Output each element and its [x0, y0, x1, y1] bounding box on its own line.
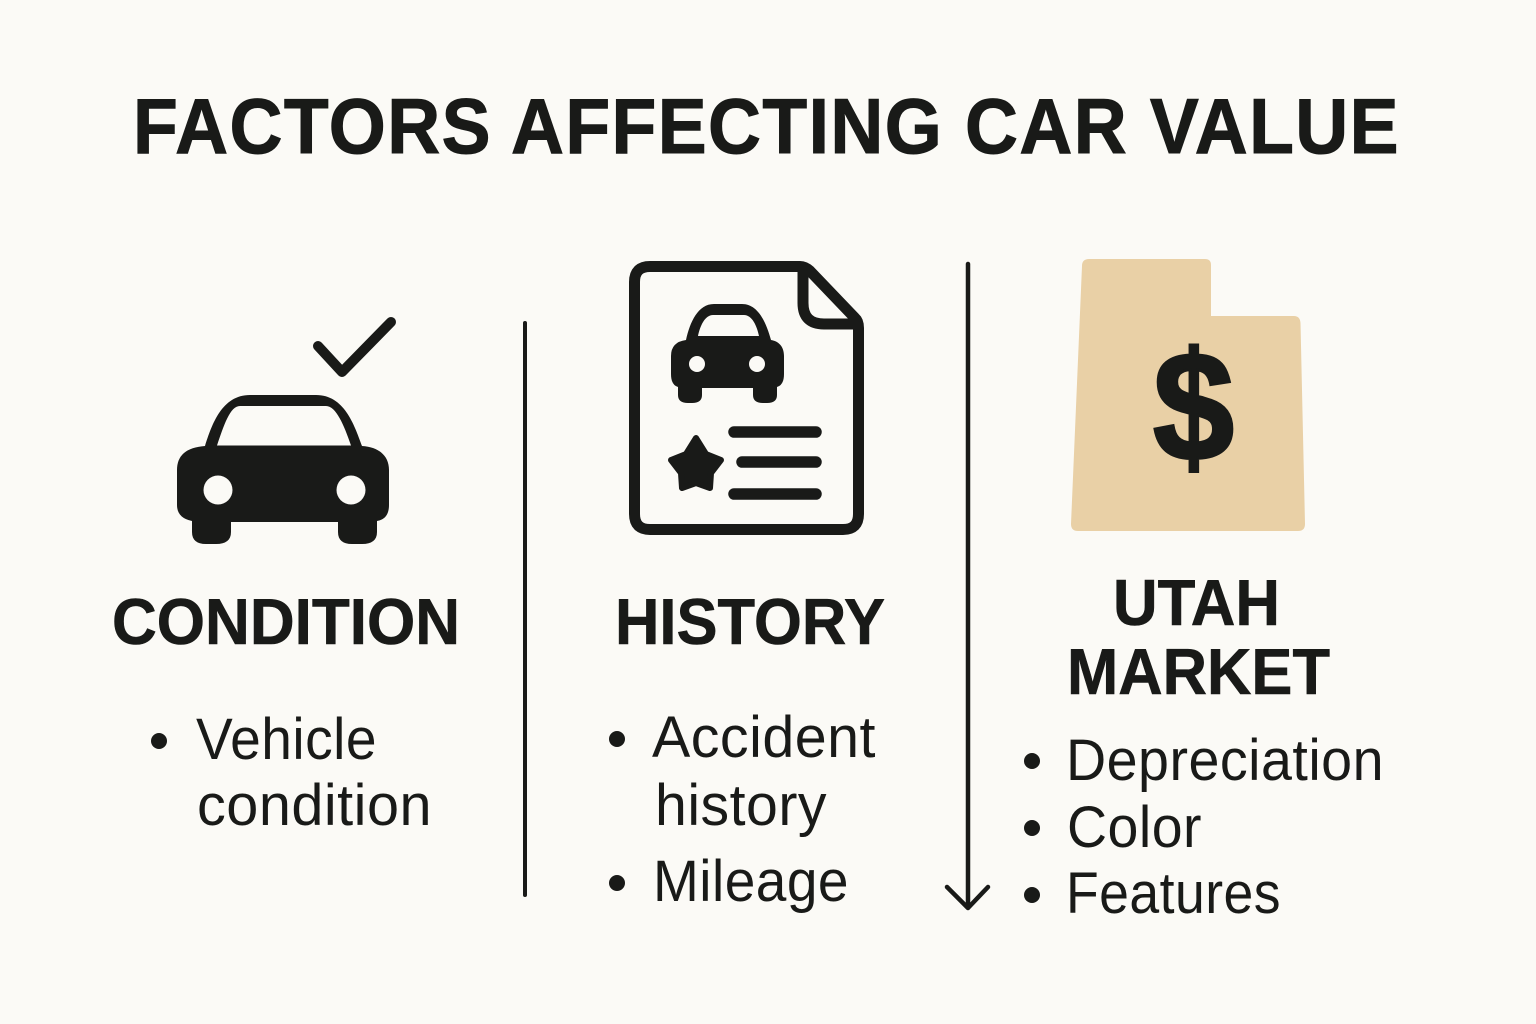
list: utah market: Features [1066, 861, 1281, 926]
icon: small car [671, 304, 784, 403]
heading: utah market [1067, 566, 1330, 708]
list: utah market: Depreciation [1066, 728, 1384, 793]
panel: utah market [1024, 259, 1384, 926]
list: condition [151, 707, 432, 838]
heading: utah market: MARKET [1067, 635, 1330, 708]
list: history: Accident [652, 705, 876, 770]
panel: history [609, 266, 885, 914]
icon: check mark [318, 322, 391, 372]
list: history [609, 705, 876, 914]
list: utah market [1024, 728, 1384, 926]
heading: condition: CONDITION [112, 585, 460, 658]
title: FACTORS AFFECTING CAR VALUE [133, 82, 1400, 170]
icon: car [177, 395, 389, 544]
icon: Utah map [1071, 259, 1305, 531]
list: condition: condition [197, 773, 432, 838]
icon: dollar sign: $ [1153, 320, 1234, 493]
list: utah market: Color [1067, 795, 1202, 860]
list: history: Mileage [653, 849, 849, 914]
list: condition: Vehicle [196, 707, 377, 772]
heading: utah market: UTAH [1113, 566, 1280, 639]
panel: condition [112, 322, 460, 838]
divider: left vertical line [523, 323, 527, 895]
heading: history: HISTORY [615, 585, 885, 658]
list: history: history [655, 773, 827, 838]
icon: document [634, 266, 858, 530]
arrow: vertical down arrow [947, 264, 988, 908]
text lines [734, 432, 816, 494]
icon: star [671, 438, 721, 488]
